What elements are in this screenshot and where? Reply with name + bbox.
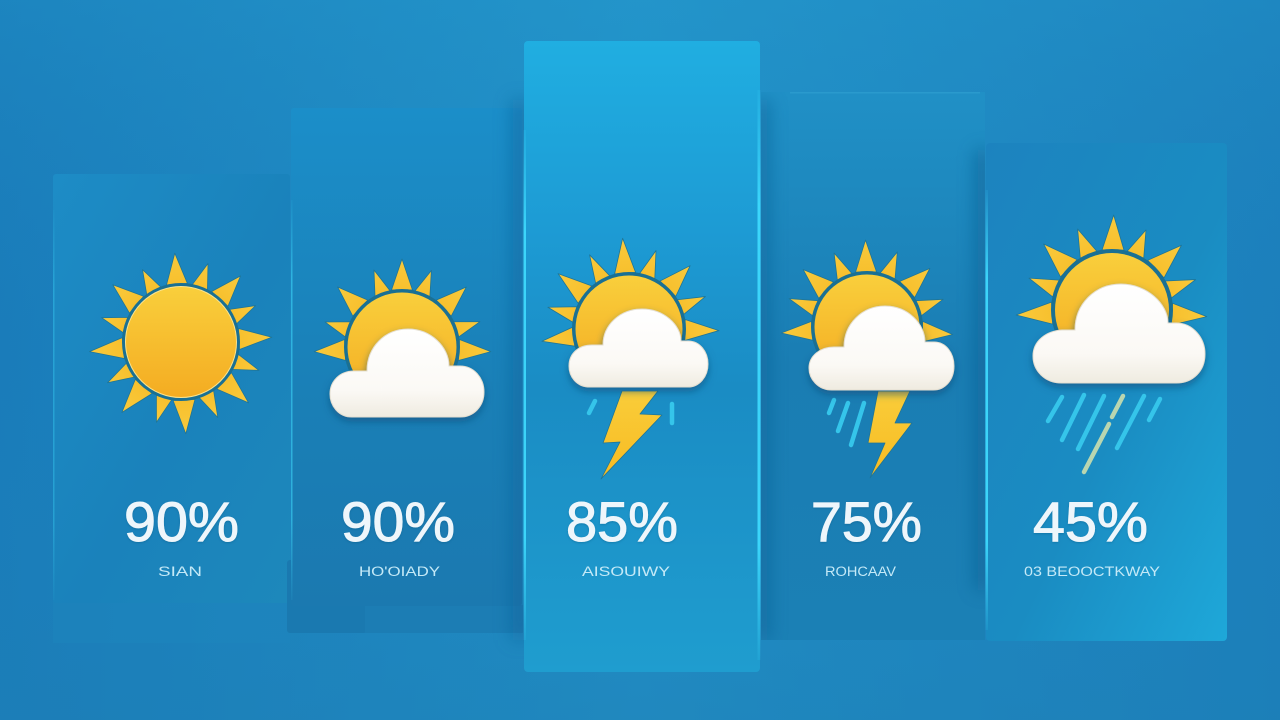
icon: sun, cloud, rain and lightning (781, 240, 954, 478)
icon: full sun (88, 252, 272, 434)
icon: rain streaks (1048, 395, 1160, 472)
shadow behind tall card (512, 100, 528, 640)
percentage: 90%: 90% (341, 490, 455, 553)
label: SIAN (158, 564, 202, 579)
icon: rain streaks (829, 400, 864, 445)
icon: cloud (330, 329, 484, 417)
icon: cloud (809, 306, 954, 390)
icon: lightning bolt (868, 391, 912, 478)
percentage: 75%: 75% (811, 490, 922, 553)
label: HO'OIADY (359, 564, 440, 579)
label: ROHCAAV (825, 564, 896, 579)
label: 03 BEOOCTKWAY (1024, 564, 1160, 579)
percentage: 45%: 45% (1033, 490, 1148, 553)
panel: card 5 rain (986, 143, 1227, 641)
icon: cloud (1033, 284, 1205, 383)
percentage: 85%: 85% (566, 490, 678, 553)
label: AISOUIWY (582, 564, 670, 579)
icon: lightning bolt (601, 391, 662, 479)
panel: card 4 storm with rain (755, 92, 990, 640)
icon: rain streaks (589, 401, 672, 423)
percentage: 90%: 90% (124, 490, 239, 553)
panel: card 2 partly cloudy (287, 108, 523, 633)
panel: card 3 thunderstorm (524, 41, 760, 672)
icon: cloud (569, 309, 708, 387)
panel: card 1 sunny (53, 174, 290, 643)
icon: sun, cloud and rain (1016, 215, 1208, 472)
icon: sun, cloud and lightning (541, 237, 719, 479)
icon: sun behind cloud (314, 259, 491, 417)
